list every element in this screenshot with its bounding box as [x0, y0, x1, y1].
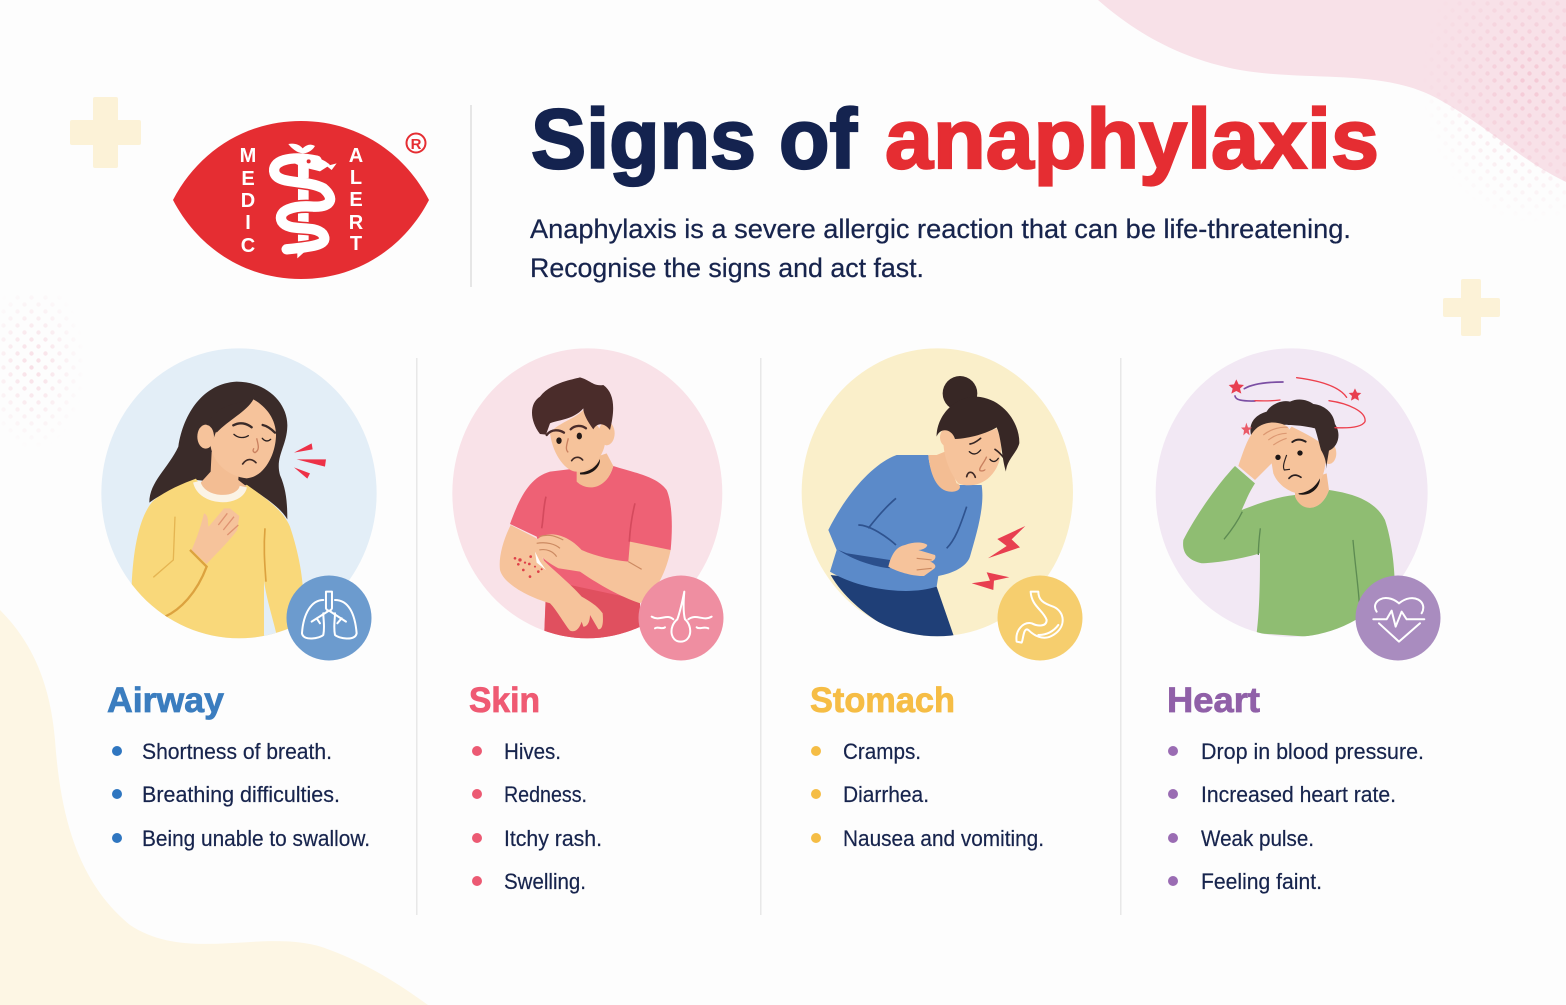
- icon: lungs badge: [286, 576, 372, 660]
- title: Signs of: [531, 92, 858, 186]
- header divider: [470, 105, 472, 287]
- logo word MEDIC: D: [241, 190, 255, 212]
- title: anaphylaxis: [885, 92, 1379, 186]
- panel: stomach: [802, 348, 1082, 851]
- list: heart symptoms: Drop in blood pressure.: [1201, 739, 1424, 764]
- illustration: man with itchy rash: [452, 348, 722, 640]
- list: skin symptoms: Redness.: [504, 782, 587, 807]
- list: airway symptoms: [112, 739, 370, 851]
- logo word MEDIC: C: [241, 235, 255, 257]
- logo word ALERT: A: [349, 145, 363, 167]
- intro description: Recognise the signs and act fast.: [530, 253, 924, 283]
- decorative pink blob top right: [1098, 0, 1566, 182]
- list: airway symptoms: Breathing difficulties.: [142, 782, 340, 807]
- icon: skin follicle badge: [638, 576, 724, 660]
- list: heart symptoms: Weak pulse.: [1201, 826, 1314, 851]
- decorative halftone dots left: [2, 302, 68, 426]
- logo word ALERT: T: [350, 233, 362, 255]
- list: heart symptoms: [1168, 739, 1424, 894]
- list: heart symptoms: Increased heart rate.: [1201, 782, 1396, 807]
- logo word MEDIC: M: [240, 145, 256, 167]
- logo: MedicAlert: [173, 121, 429, 279]
- illustration: woman with stomach pain: [802, 348, 1073, 640]
- intro description: [530, 214, 1351, 283]
- decorative cream blob bottom left: [0, 610, 428, 1005]
- heading: Heart: Heart: [1167, 681, 1260, 720]
- list: skin symptoms: Itchy rash.: [504, 826, 602, 851]
- logo eye shape: [173, 121, 429, 279]
- title: [531, 92, 1379, 186]
- intro description: Anaphylaxis is a severe allergic reaction that can be life-threatening.: [530, 214, 1351, 244]
- decorative plus right: [1443, 279, 1500, 336]
- list: airway symptoms: Being unable to swallow.: [142, 826, 370, 851]
- list: heart symptoms: Feeling faint.: [1201, 869, 1322, 894]
- logo word ALERT: L: [350, 167, 362, 189]
- list: skin symptoms: Hives.: [504, 739, 561, 764]
- list: skin symptoms: Swelling.: [504, 869, 586, 894]
- list: stomach symptoms: Cramps.: [843, 739, 921, 764]
- logo registered mark: R: [411, 136, 422, 153]
- list: airway symptoms: Shortness of breath.: [142, 739, 332, 764]
- logo rod and serpent: [274, 144, 337, 258]
- logo word ALERT: E: [349, 189, 363, 211]
- heading: Skin: Skin: [469, 681, 540, 720]
- logo word ALERT: [349, 145, 364, 255]
- icon: heart badge: [1356, 576, 1440, 660]
- column dividers: [416, 358, 1122, 915]
- heading: Airway: Airway: [107, 681, 225, 720]
- icon: stomach badge: [998, 576, 1082, 660]
- logo word MEDIC: E: [241, 168, 255, 190]
- illustration: dizzy man: [1156, 348, 1428, 640]
- panel: skin: [452, 348, 724, 894]
- logo word MEDIC: [240, 145, 256, 257]
- list: stomach symptoms: [811, 739, 1044, 851]
- logo word MEDIC: I: [245, 212, 251, 234]
- list: stomach symptoms: Diarrhea.: [843, 782, 929, 807]
- logo registered mark: [406, 134, 426, 153]
- logo word ALERT: R: [349, 212, 364, 234]
- heading: Stomach: Stomach: [810, 681, 955, 720]
- decorative halftone dots top right: [1450, 2, 1566, 194]
- illustration: woman short of breath: [101, 348, 377, 640]
- list: skin symptoms: [472, 739, 602, 894]
- decorative plus top left: [70, 97, 141, 168]
- list: stomach symptoms: Nausea and vomiting.: [843, 826, 1044, 851]
- panel: airway: [101, 348, 377, 851]
- panel: heart: [1156, 348, 1440, 894]
